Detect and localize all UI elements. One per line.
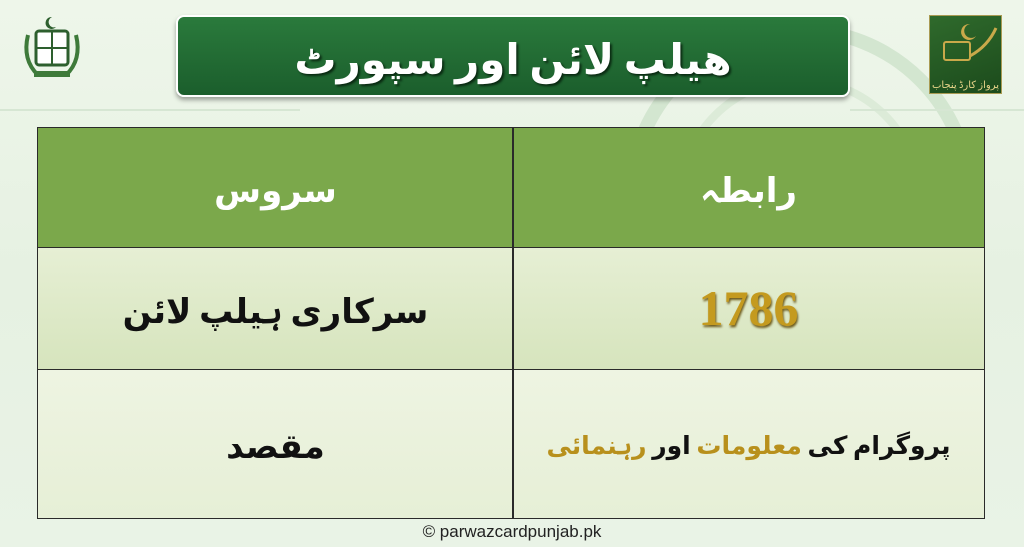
table [37,127,985,519]
row: helpline [38,248,984,370]
header: service: سروس [214,163,337,212]
header row [38,128,984,248]
header: contact: رابطہ [700,163,797,212]
text: government helpline: سرکاری ہیلپ لائن [123,284,428,333]
footer: © parwazcardpunjab.pk [423,522,601,541]
logo: parwaz card punjab [929,15,1002,94]
logo: government emblem [24,17,80,77]
text: program info and guidance: پروگرام کی معلومات اور رہنمائی [546,426,951,462]
title banner: هیلپ لائن اور سپورٹ [294,26,732,86]
logo: parwaz card punjab: پرواز کارڈ پنجاب [932,76,999,91]
vertical divider [512,128,514,518]
title banner [176,15,850,97]
text: purpose: مقصد [226,419,325,468]
row: purpose [38,370,984,518]
number 1786: 1786 [698,280,798,336]
